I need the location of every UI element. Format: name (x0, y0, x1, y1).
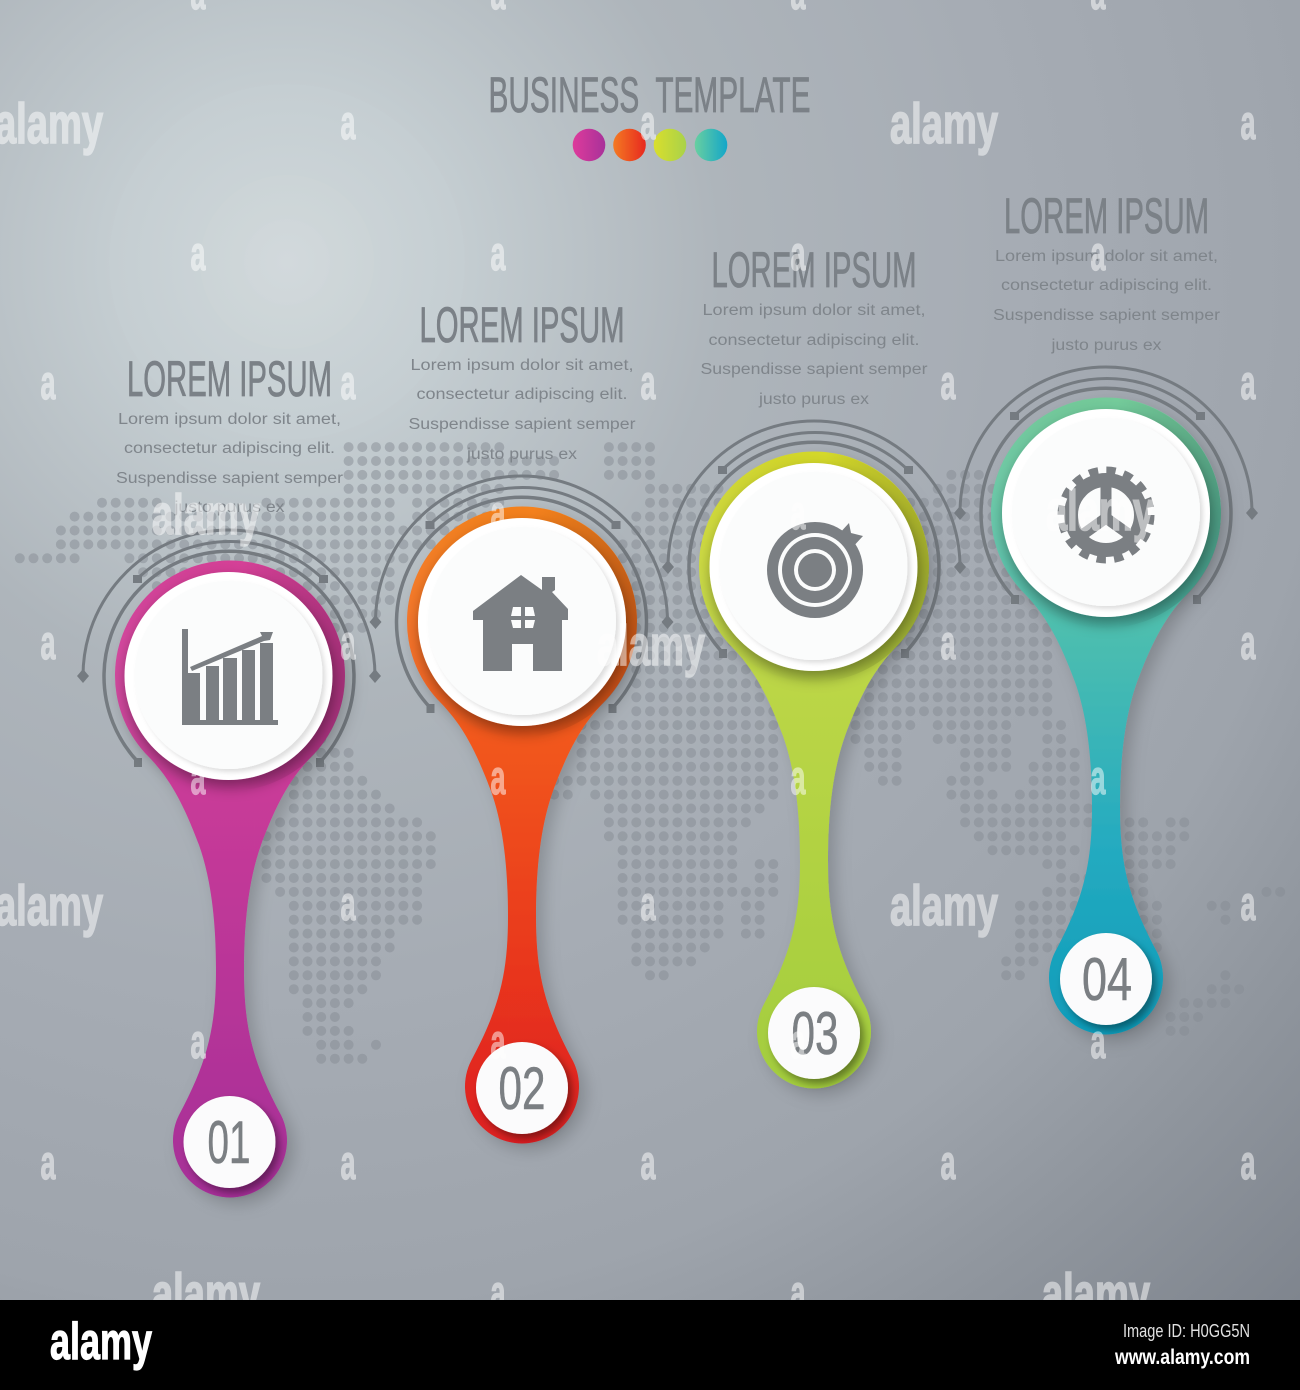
watermarks: a (490, 487, 506, 540)
watermarks: a (190, 228, 206, 281)
step 2 text block: Lorem ipsum dolor sit amet, (410, 357, 634, 374)
watermarks: a (790, 752, 806, 805)
step 1 text block (116, 351, 343, 516)
watermarks: a (1240, 617, 1256, 670)
footer logo: alamy (50, 1313, 152, 1371)
watermarks: a (40, 617, 56, 670)
watermarks: a (1090, 752, 1106, 805)
step 4 text block: Suspendisse sapient semper (993, 307, 1220, 324)
title colour dots (573, 129, 727, 161)
watermarks: a (490, 752, 506, 805)
watermarks: a (190, 1016, 206, 1069)
step 1 text block: justo purus ex (173, 499, 285, 516)
watermarks: a (1090, 1016, 1106, 1069)
watermarks: a (940, 357, 956, 410)
number 03: 03 (792, 1000, 838, 1067)
watermarks: alamy (152, 1262, 260, 1326)
step 3 text block: consectetur adipiscing elit. (708, 332, 920, 349)
step 4 text block (993, 188, 1220, 354)
step 1 text block: LOREM IPSUM (127, 351, 332, 407)
image id: Image ID: H0GG5N (1123, 1321, 1250, 1341)
number 01: 01 (208, 1109, 250, 1176)
dotted world map (20, 447, 1280, 1059)
watermarks: a (40, 357, 56, 410)
icon: house (473, 575, 568, 671)
step 2 text block: consectetur adipiscing elit. (416, 386, 628, 403)
watermarks: a (1240, 1137, 1256, 1190)
watermarks: alamy (890, 874, 998, 938)
watermarks: a (490, 228, 506, 281)
step 2 text block (408, 297, 636, 463)
step 2 text block: Suspendisse sapient semper (408, 416, 636, 433)
watermarks: a (640, 1137, 656, 1190)
watermarks: a (940, 617, 956, 670)
watermarks: a (640, 357, 656, 410)
watermarks: a (790, 1016, 806, 1069)
step 3 text block: Suspendisse sapient semper (700, 361, 928, 378)
watermarks: a (940, 1137, 956, 1190)
pin 1 (77, 530, 381, 1197)
watermarks: a (790, 228, 806, 281)
step 2 text block: justo purus ex (466, 446, 577, 463)
watermarks: a (1240, 357, 1256, 410)
pin 2 (370, 476, 674, 1143)
watermarks: alamy (1042, 1262, 1150, 1326)
number 02: 02 (498, 1055, 546, 1122)
watermarks: a (340, 97, 356, 150)
step 1 text block: Suspendisse sapient semper (116, 470, 343, 487)
footer bar (0, 1300, 1300, 1390)
watermarks: a (1240, 97, 1256, 150)
icon: gear (1062, 471, 1150, 559)
watermarks: a (490, 1016, 506, 1069)
title: BUSINESS TEMPLATE (488, 67, 810, 123)
step 4 text block: consectetur adipiscing elit. (1001, 277, 1212, 294)
icon: bar chart (182, 629, 278, 725)
watermarks: a (790, 1267, 806, 1320)
step 1 text block: Lorem ipsum dolor sit amet, (118, 411, 341, 428)
watermarks: a (340, 878, 356, 931)
step 3 text block: LOREM IPSUM (712, 242, 916, 298)
step 1 text block: consectetur adipiscing elit. (124, 440, 335, 457)
watermarks: alamy (890, 92, 998, 156)
watermarks: a (790, 487, 806, 540)
number 04: 04 (1082, 946, 1132, 1013)
pin 3 (662, 421, 966, 1088)
watermarks: a (640, 878, 656, 931)
step 4 text block: justo purus ex (1050, 337, 1162, 354)
step 3 text block: justo purus ex (758, 391, 869, 408)
step 3 text block (700, 242, 928, 408)
icon: target (767, 522, 863, 618)
watermarks: a (1090, 228, 1106, 281)
step 2 text block: LOREM IPSUM (420, 297, 624, 353)
watermarks: a (40, 1137, 56, 1190)
watermarks: a (340, 357, 356, 410)
step 4 text block: Lorem ipsum dolor sit amet, (995, 248, 1218, 265)
watermarks: a (190, 752, 206, 805)
step 3 text block: Lorem ipsum dolor sit amet, (702, 302, 926, 319)
watermarks: a (490, 1267, 506, 1320)
watermarks: a (340, 617, 356, 670)
watermarks: alamy (152, 483, 260, 547)
watermarks: a (640, 97, 656, 150)
watermarks: a (1240, 878, 1256, 931)
website: www.alamy.com (1114, 1346, 1250, 1369)
watermarks: a (340, 1137, 356, 1190)
pin 4 (954, 367, 1258, 1034)
watermarks: alamy (597, 614, 705, 678)
watermarks: alamy (1046, 479, 1154, 543)
